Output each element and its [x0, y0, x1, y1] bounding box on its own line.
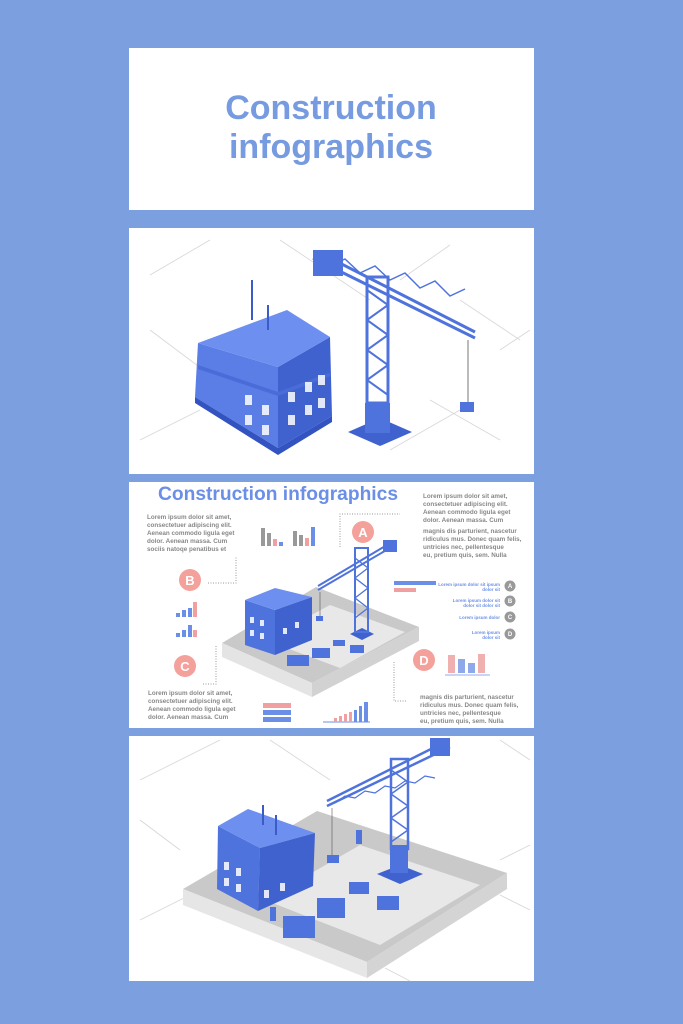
panel: building and crane [129, 228, 534, 474]
text block: top left: Lorem ipsum dolor sit amet, [147, 514, 232, 521]
text block: bottom right: eu, pretium quis, sem. Nulla [420, 718, 504, 725]
crane [327, 738, 450, 884]
building [195, 280, 332, 455]
legend right: A [508, 584, 513, 590]
text block: top right: consectetuer adipiscing elit. [423, 501, 508, 508]
callout B [179, 556, 236, 591]
text block: top left: sociis natoqe penatibus et [147, 546, 227, 553]
text block: top left: dolor. Aenean massa. Cum [147, 538, 228, 545]
crane [313, 250, 475, 446]
text block: top right: untricies nec, pellentesque [423, 544, 504, 551]
legend right: Lorem ipsum [472, 630, 500, 635]
legend right: dolor sit [482, 635, 501, 640]
callout C: C [180, 659, 190, 674]
text block: top right: ridiculus mus. Donec quam felis, [423, 536, 522, 543]
callout C [174, 646, 216, 684]
text block: top right: Aenean commodo ligula eget [423, 509, 511, 516]
text block: bottom left: dolor. Aenean massa. Cum [148, 714, 229, 721]
legend right: dolor sit [482, 587, 501, 592]
text block: bottom right [420, 694, 519, 725]
callout D: D [419, 653, 429, 668]
chevron chart [445, 654, 490, 675]
text block: top right: dolor. Aenean massa. Cum [423, 517, 504, 524]
heading: Construction infographics [158, 483, 398, 505]
text block: bottom left: consectetuer adipiscing elit. [148, 698, 233, 705]
text block: top right: eu, pretium quis, sem. Nulla [423, 552, 507, 559]
text block: top left: Aenean commodo ligula eget [147, 530, 235, 537]
people icons bottom [263, 703, 291, 722]
text block: bottom left [148, 690, 236, 721]
text block: top right: magnis dis parturient, nascetur [423, 528, 517, 535]
legend right: Lorem ipsum dolor sit ipsum [438, 582, 500, 587]
bar charts left [176, 602, 197, 637]
panel: infographic [129, 482, 534, 728]
text block: bottom left: Aenean commodo ligula eget [148, 706, 236, 713]
legend right: B [508, 599, 513, 605]
text block: bottom right: untricies nec, pellentesque [420, 710, 501, 717]
legend right: C [508, 615, 513, 621]
text block: top left [147, 514, 235, 553]
bar chart bottom [323, 702, 370, 722]
panel: construction site [129, 736, 534, 981]
callout A [340, 514, 400, 547]
text block: bottom right: ridiculus mus. Donec quam felis, [420, 702, 519, 709]
legend right: D [508, 632, 513, 638]
site platform [183, 811, 507, 978]
callout A: A [358, 525, 368, 540]
callout B: B [185, 573, 195, 588]
legend right: dolor sit dolor sit [463, 603, 501, 608]
building [217, 805, 315, 911]
legend right: Lorem ipsum dolor [459, 615, 500, 620]
legend right [438, 580, 516, 640]
panel: title [129, 48, 534, 210]
text block: bottom left: Lorem ipsum dolor sit amet, [148, 690, 233, 697]
people icons right [394, 581, 436, 592]
materials and truck [270, 808, 399, 938]
platform scene [222, 540, 419, 697]
bar charts top [261, 527, 315, 546]
text block: top right [423, 493, 522, 559]
title [225, 89, 437, 166]
text block: top left: consectetuer adipiscing elit. [147, 522, 232, 529]
title: Construction [225, 89, 437, 127]
legend right: Lorem ipsum dolor sit [453, 598, 500, 603]
callout D [394, 649, 435, 701]
text block: bottom right: magnis dis parturient, nascetur [420, 694, 514, 701]
text block: top right: Lorem ipsum dolor sit amet, [423, 493, 508, 500]
title: infographics [229, 128, 433, 166]
